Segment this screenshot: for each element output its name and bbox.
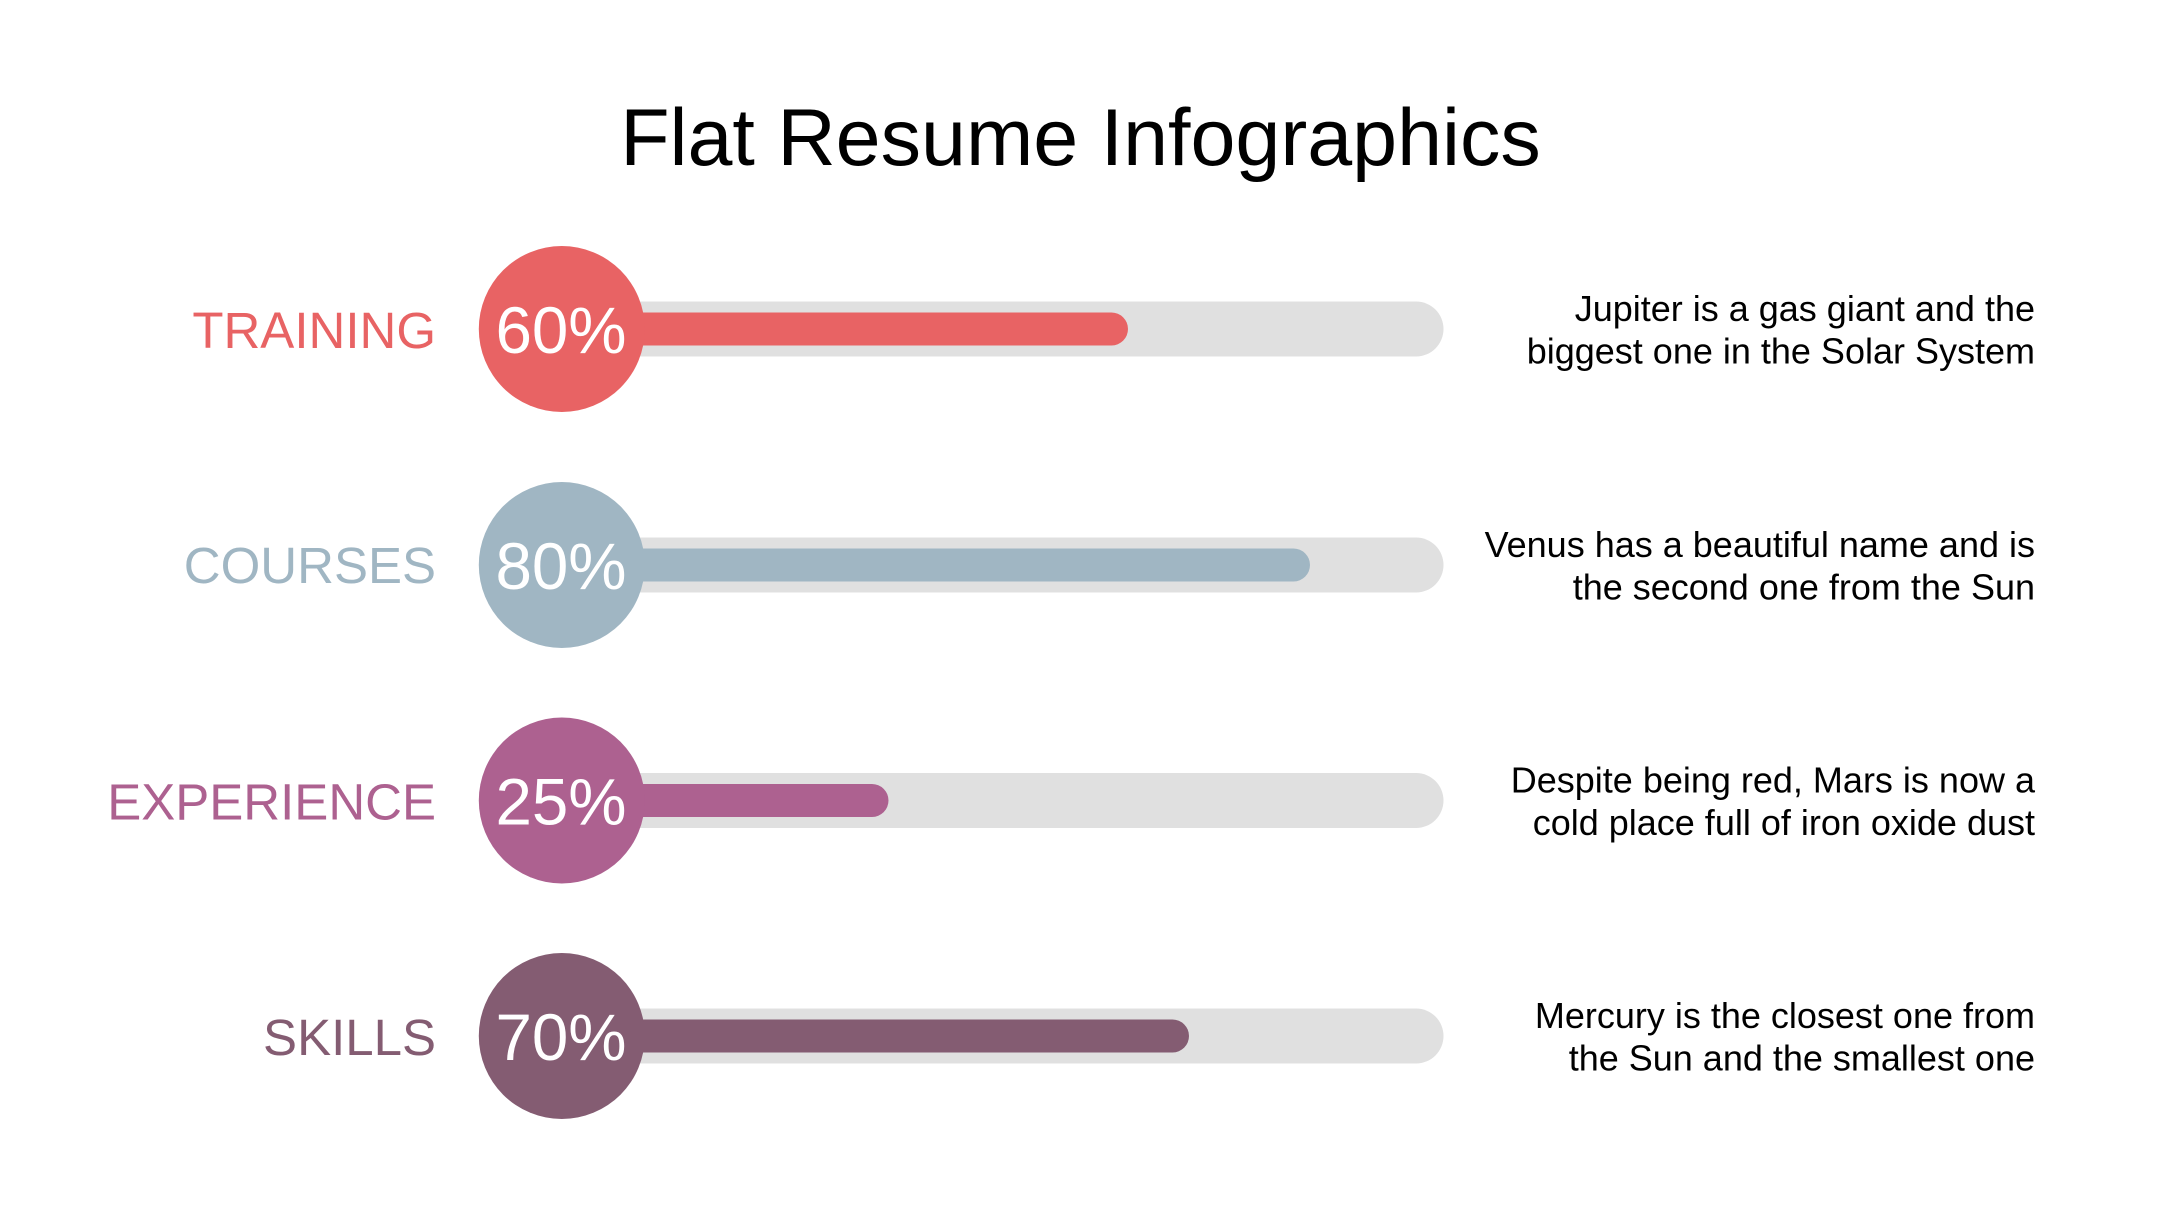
label: training: TRAINING: [192, 302, 436, 359]
panel: courses row: [184, 482, 2035, 648]
label: experience: EXPERIENCE: [107, 774, 436, 830]
progress fill: courses 80%: [561, 548, 1310, 582]
badge circle: experience: [479, 718, 645, 884]
description: skills: the Sun and the smallest one: [1569, 1038, 2035, 1078]
percentage: courses: 80%: [495, 530, 627, 603]
label: courses: COURSES: [184, 537, 436, 594]
description: skills: Mercury is the closest one from: [1535, 995, 2035, 1036]
badge circle: skills: [479, 953, 645, 1119]
description: experience: cold place full of iron oxide dust: [1533, 802, 2035, 843]
percentage: training: 60%: [495, 294, 627, 367]
label: skills: SKILLS: [263, 1009, 436, 1066]
description: courses: the second one from the Sun: [1573, 566, 2035, 608]
title: Flat Resume Infographics: [620, 93, 1541, 183]
badge circle: courses: [479, 482, 645, 648]
progress track: skills: [561, 1008, 1444, 1064]
progress fill: experience 25%: [561, 784, 888, 817]
progress track: training: [561, 302, 1444, 356]
description: courses: Venus has a beautiful name and is: [1485, 524, 2035, 565]
description: training: biggest one in the Solar System: [1527, 330, 2035, 372]
panel: training row: [192, 246, 2035, 412]
progress track: experience: [561, 773, 1444, 828]
badge circle: training: [479, 246, 645, 412]
description: training: Jupiter is a gas giant and the: [1575, 288, 2035, 329]
panel: skills row: [263, 953, 2035, 1119]
percentage: experience: 25%: [495, 766, 627, 838]
description: experience: Despite being red, Mars is now a: [1511, 760, 2036, 800]
progress fill: training 60%: [561, 312, 1128, 346]
progress fill: skills 70%: [561, 1020, 1189, 1052]
progress track: courses: [561, 538, 1444, 592]
panel: experience row: [107, 718, 2036, 884]
percentage: skills: 70%: [495, 1001, 627, 1074]
